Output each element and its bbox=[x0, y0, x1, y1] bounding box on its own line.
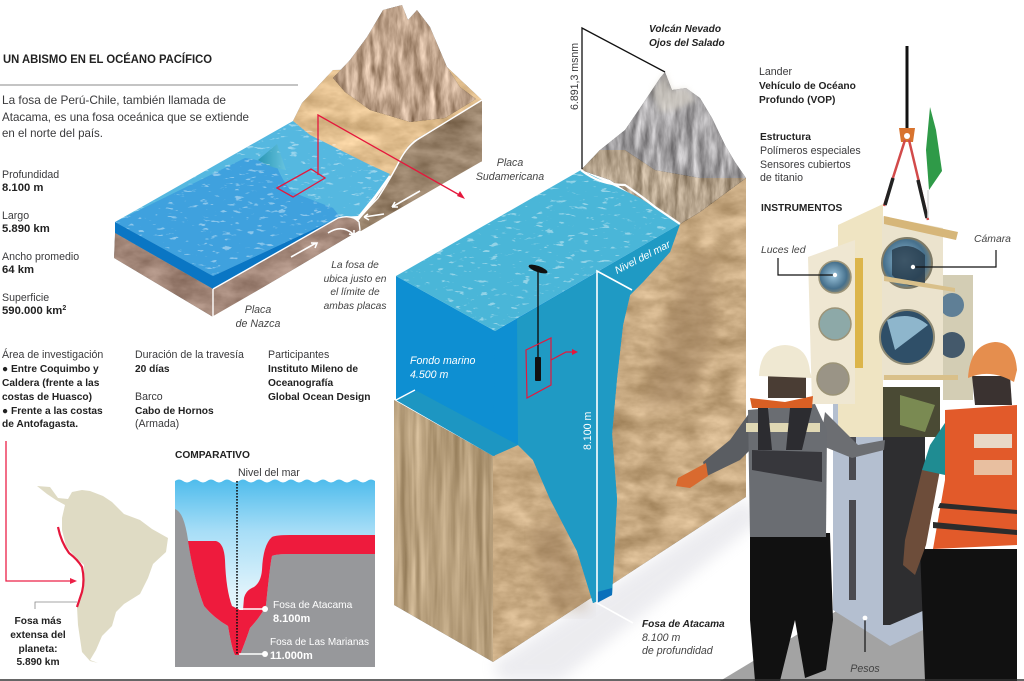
expedition details: de Antofagasta. bbox=[2, 419, 78, 430]
intro text: La fosa de Perú-Chile, también llamada de bbox=[2, 93, 226, 107]
labels on big block: 4.500 m bbox=[410, 369, 448, 381]
trench callout bbox=[10, 602, 77, 668]
expedition details: Área de investigación bbox=[2, 348, 103, 361]
plate labels: de Nazca bbox=[236, 318, 280, 330]
expedition details: Duración de la travesía bbox=[135, 349, 244, 361]
mountain base brown bbox=[581, 150, 746, 224]
surface ripples bbox=[396, 170, 680, 331]
lander description: Polímeros especiales bbox=[760, 145, 861, 157]
comparison chart bbox=[175, 467, 375, 667]
large trench block bbox=[394, 72, 760, 681]
hook bbox=[899, 128, 915, 142]
legs bbox=[920, 549, 1017, 681]
deep blue front-left water bbox=[396, 276, 495, 456]
frame inner dark bbox=[883, 437, 925, 625]
Marianas marker: 11.000m bbox=[270, 650, 313, 662]
arm bbox=[903, 470, 940, 575]
arm right bbox=[820, 412, 885, 458]
sea surface bbox=[396, 170, 680, 331]
red locator bbox=[277, 115, 463, 197]
plate labels: Sudamericana bbox=[476, 171, 544, 183]
sea level dotted axis bbox=[236, 481, 238, 655]
neck bbox=[768, 375, 806, 398]
expedition details: Global Ocean Design bbox=[268, 392, 370, 403]
plate labels: ubica justo en bbox=[324, 274, 387, 285]
Atacama marker bbox=[239, 600, 353, 625]
expedition details: ● Entre Coquimbo y bbox=[2, 364, 99, 375]
expedition details: costas de Huasco) bbox=[2, 392, 92, 403]
expedition details: Barco bbox=[135, 391, 163, 403]
plate movement arrows bbox=[291, 191, 420, 257]
plate labels: Placa bbox=[245, 304, 271, 316]
labels on big block: 8.100 m bbox=[582, 412, 594, 450]
labels on big block: Nivel del mar bbox=[613, 239, 673, 277]
labels on big block: Fondo marino bbox=[410, 355, 475, 367]
trench callout: 5.890 km bbox=[16, 657, 60, 668]
key figures: 590.000 km bbox=[2, 305, 62, 317]
left worker bbox=[676, 345, 885, 681]
lander description: Lander bbox=[759, 66, 792, 78]
labels on big block bbox=[410, 239, 673, 450]
lander vehicle photo illustration bbox=[808, 46, 973, 646]
plate labels: ambas placas bbox=[324, 301, 386, 312]
lander description: Estructura bbox=[760, 132, 811, 143]
volcano height marker: Volcán Nevado bbox=[649, 24, 721, 35]
lander description: Profundo (VOP) bbox=[759, 95, 835, 106]
key figures: Profundidad bbox=[2, 169, 59, 181]
mountain snow bbox=[652, 72, 696, 112]
right earth face bbox=[493, 178, 746, 662]
trench callout: Fosa más bbox=[14, 616, 62, 627]
sea floor tick bbox=[396, 390, 415, 400]
key figures: 64 km bbox=[2, 264, 34, 276]
vest bbox=[933, 405, 1017, 549]
title: UN ABISMO EN EL OCÉANO PACÍFICO bbox=[3, 51, 212, 66]
expedition details: Participantes bbox=[268, 349, 329, 361]
cross bars bbox=[884, 276, 958, 380]
trench callout: extensa del bbox=[10, 630, 66, 641]
legs bbox=[750, 533, 833, 681]
right worker bbox=[903, 342, 1017, 681]
sea floor bbox=[175, 509, 375, 667]
block outline bbox=[213, 100, 482, 317]
key figures bbox=[2, 169, 79, 317]
intro text bbox=[2, 93, 249, 140]
helmet bbox=[759, 345, 812, 378]
Marianas marker bbox=[239, 637, 369, 662]
plate labels bbox=[236, 157, 544, 330]
callout: camera: Cámara bbox=[974, 234, 1011, 245]
top bar bbox=[884, 216, 958, 240]
main camera module bbox=[882, 216, 943, 380]
sleeve bbox=[922, 420, 947, 475]
trench notch bbox=[258, 144, 286, 170]
dark blotches on earth bbox=[645, 250, 716, 410]
hoist cable bbox=[906, 46, 908, 128]
expedition details: Cabo de Hornos bbox=[135, 406, 214, 417]
intro text: en el norte del país. bbox=[2, 126, 103, 140]
Marianas marker: Fosa de Las Marianas bbox=[270, 637, 369, 648]
south american plate face bbox=[358, 100, 482, 232]
nazca plate face bbox=[213, 217, 360, 317]
trench callout: planeta: bbox=[18, 644, 58, 655]
harness bbox=[758, 408, 812, 450]
volcano height marker bbox=[569, 24, 725, 169]
trench water lighter section bbox=[517, 224, 680, 603]
neck and hair bbox=[972, 376, 1012, 405]
intro text: Atacama, es una fosa oceánica que se extiende bbox=[2, 110, 249, 124]
collar bbox=[750, 396, 813, 408]
lander description: de titanio bbox=[760, 172, 803, 184]
red locator arrow to map bbox=[6, 441, 77, 584]
trench depth label: de profundidad bbox=[642, 645, 714, 657]
arm left bbox=[703, 412, 755, 476]
camera lenses bbox=[880, 238, 934, 364]
small mountain bbox=[333, 5, 476, 122]
plate labels: Placa bbox=[497, 157, 523, 169]
lander in water bbox=[526, 263, 578, 398]
lander description: Sensores cubiertos bbox=[760, 159, 851, 171]
key figures: 8.100 m bbox=[2, 182, 43, 194]
blue front-right water bbox=[493, 224, 680, 603]
plate labels: el límite de bbox=[330, 287, 380, 298]
straps bbox=[884, 140, 928, 220]
shoreline foam bbox=[581, 170, 680, 224]
lander description: Vehículo de Océano bbox=[759, 81, 856, 92]
left earth face bbox=[114, 233, 213, 317]
expedition details: (Armada) bbox=[135, 418, 179, 430]
sea floor sheet bbox=[396, 391, 518, 456]
central post bbox=[838, 204, 883, 437]
sea level label: Nivel del mar bbox=[238, 467, 300, 479]
callout: weights: Pesos bbox=[850, 663, 880, 675]
trench depth label: 8.100 m bbox=[642, 632, 680, 644]
expedition details: ● Frente a las costas bbox=[2, 406, 103, 417]
depth line bbox=[597, 271, 633, 623]
floor bbox=[720, 610, 1017, 681]
callout: camera bbox=[911, 234, 1011, 269]
callout: weights bbox=[850, 616, 880, 675]
comparison chart heading: COMPARATIVO bbox=[175, 450, 250, 461]
plate labels: La fosa de bbox=[331, 260, 379, 271]
trench depth label bbox=[642, 619, 725, 657]
dark blue water edge bbox=[115, 216, 345, 289]
deep water surface bbox=[115, 158, 340, 276]
trench depth label: Fosa de Atacama bbox=[642, 619, 725, 630]
key figures: 2 bbox=[62, 305, 66, 312]
expedition details: 20 días bbox=[135, 364, 170, 375]
yellow ruler stripe bbox=[855, 258, 863, 368]
LED lenses bbox=[817, 261, 851, 395]
expedition details: Instituto Mileno de bbox=[268, 364, 358, 375]
sea bbox=[175, 480, 375, 667]
Atacama marker: Fosa de Atacama bbox=[273, 600, 353, 611]
ripples bbox=[115, 121, 390, 276]
Atacama profile in red bbox=[188, 535, 375, 655]
lander description: INSTRUMENTOS bbox=[761, 203, 843, 214]
vest straps bbox=[933, 503, 1017, 535]
lower frame bbox=[833, 404, 923, 646]
left earth face bbox=[394, 400, 493, 662]
LED module bbox=[808, 240, 855, 404]
expedition details bbox=[2, 348, 370, 430]
trench bottom bbox=[597, 588, 612, 603]
sand land surface bbox=[293, 67, 482, 176]
key figures: Largo bbox=[2, 210, 29, 222]
vest labels bbox=[974, 434, 1012, 448]
reflective band bbox=[746, 423, 820, 432]
map: South America bbox=[37, 486, 168, 663]
callout: LED lights bbox=[761, 245, 837, 277]
key figures: Superficie bbox=[2, 292, 49, 304]
key figures: 5.890 km bbox=[2, 223, 50, 235]
trench red line bbox=[58, 527, 84, 607]
expedition details: Oceanografía bbox=[268, 378, 333, 389]
helmet bbox=[968, 342, 1017, 382]
shallow water surface bbox=[115, 121, 390, 276]
expedition details: Caldera (frente a las bbox=[2, 378, 100, 389]
small tectonic block diagram bbox=[114, 5, 482, 317]
lander description bbox=[759, 66, 861, 214]
torso bbox=[748, 404, 827, 537]
callout: LED lights: Luces led bbox=[761, 245, 807, 256]
volcano height marker: Ojos del Salado bbox=[649, 38, 725, 49]
flag bbox=[926, 107, 942, 190]
Atacama marker: 8.100m bbox=[273, 613, 311, 625]
electronics bbox=[883, 387, 940, 437]
ground shadow bbox=[493, 498, 760, 681]
key figures: Ancho promedio bbox=[2, 251, 79, 263]
hand bbox=[676, 463, 708, 488]
volcano height marker: 6.891,3 msnm bbox=[569, 43, 581, 110]
rear module bbox=[943, 275, 973, 400]
large mountain bbox=[581, 72, 746, 224]
